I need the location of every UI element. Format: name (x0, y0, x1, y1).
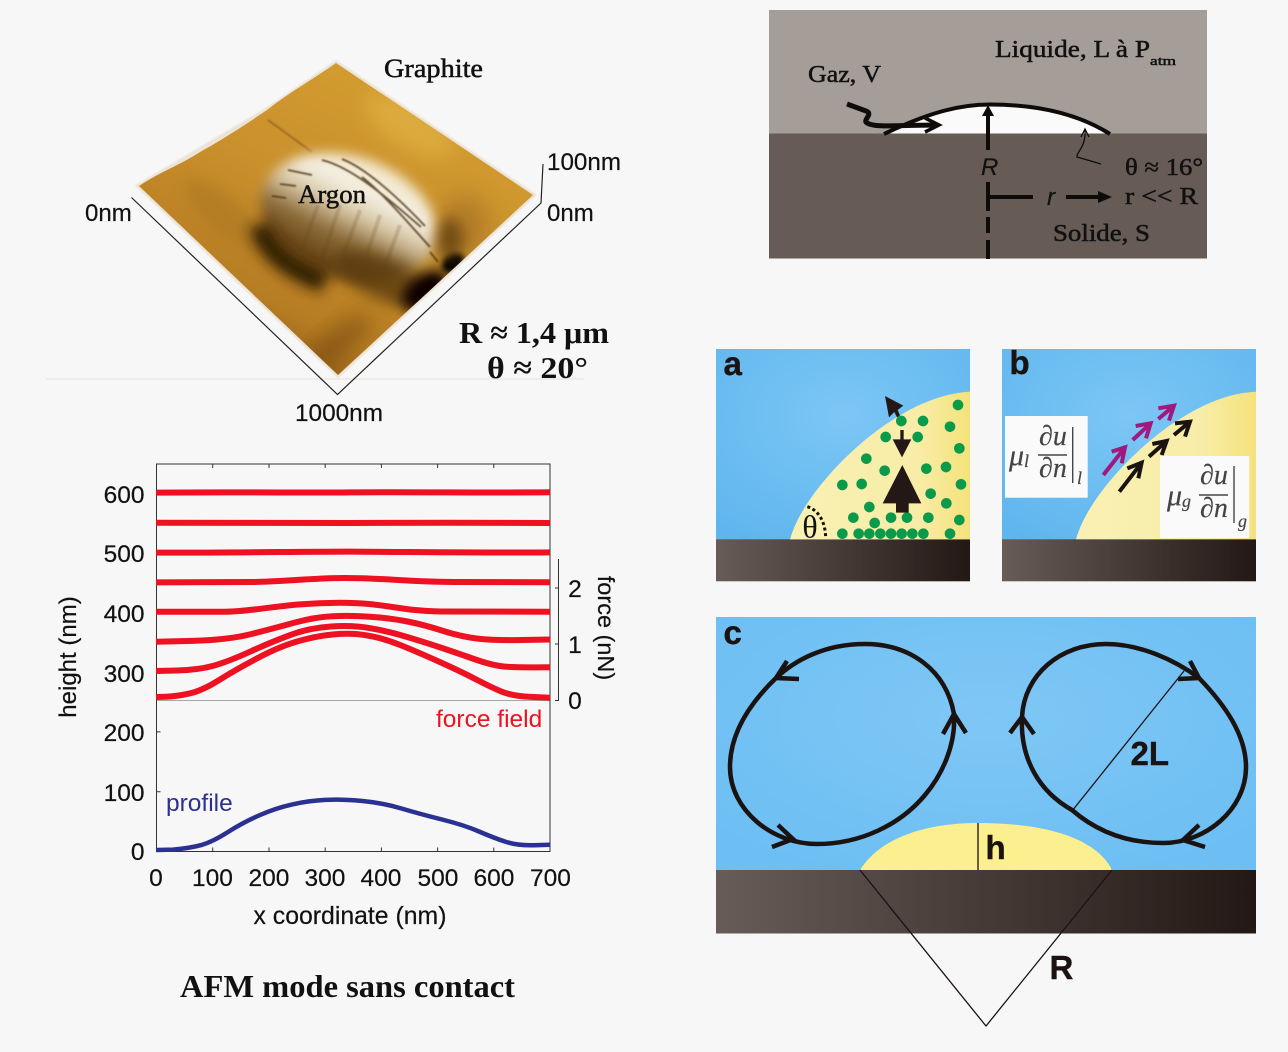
formula box: gas stress: ∂u (1200, 460, 1228, 491)
force field baseline (156, 700, 550, 702)
y axis numbers: 500 (104, 541, 144, 568)
force axis numbers (568, 576, 582, 715)
x axis numbers: 200 (249, 865, 289, 892)
axis label: 100nm: 100nm (547, 149, 621, 176)
force field label: force field (436, 706, 542, 733)
y axis title: height (nm) (55, 596, 82, 718)
red force field curves (156, 492, 550, 698)
formula box: liquid stress: l (1077, 468, 1082, 488)
force axis numbers: 2 (568, 576, 582, 603)
formula box: liquid stress: μ (1008, 439, 1024, 472)
liquid (769, 10, 1207, 134)
axis label: 1000nm: 1000nm (295, 400, 383, 427)
panel a: droplet with green molecules (716, 345, 970, 581)
y axis numbers (104, 482, 144, 866)
x axis numbers: 700 (530, 865, 571, 892)
left circulation loop (730, 644, 966, 847)
chart frame and ticks (156, 464, 550, 852)
gas bubble (884, 104, 1110, 134)
green molecules (837, 400, 966, 539)
panel: nanobubble schematic (769, 10, 1207, 259)
droplet (860, 823, 1112, 870)
force axis numbers: 1 (568, 632, 582, 659)
droplet (1076, 392, 1256, 539)
label: R italic: R (981, 154, 998, 181)
panel c: circulation around droplet (716, 614, 1256, 1026)
y axis numbers: 200 (104, 720, 144, 747)
profile label: profile (166, 790, 233, 817)
x axis numbers: 300 (305, 865, 345, 892)
symmetry axis (986, 182, 990, 259)
radius triangle (860, 870, 1112, 1026)
y axis numbers: 300 (104, 661, 144, 688)
AFM axes (132, 164, 543, 394)
formula box: gas stress: μ (1166, 479, 1182, 512)
label: R: R (1050, 949, 1074, 986)
panel letter b: b (1010, 344, 1030, 381)
axis label: 0nm right: 0nm (547, 200, 594, 227)
substrate (716, 870, 1256, 934)
formula box: liquid stress (1005, 416, 1088, 498)
label: gas: Gaz, V (808, 62, 882, 88)
label: theta: θ ≈ 16° (1125, 155, 1203, 181)
water background (716, 349, 970, 540)
bubble outline (884, 104, 1110, 134)
height line h (977, 823, 979, 870)
theta symbol: θ (802, 508, 818, 544)
label: liquid: Liquide, L à P (995, 37, 1150, 63)
AFM 3D image of argon nanobubble on graphite (130, 55, 540, 385)
formula box: liquid stress: ∂u (1039, 421, 1067, 452)
y axis numbers: 0 (131, 839, 144, 866)
droplet (790, 392, 970, 539)
formula box: gas stress: ∂n (1200, 493, 1228, 524)
arrow: escape arrow (885, 396, 903, 417)
label: 2L: 2L (1130, 735, 1169, 772)
x axis numbers: 400 (361, 865, 401, 892)
force axis numbers: 0 (568, 688, 582, 715)
formula box: liquid stress: ∂n (1039, 453, 1067, 484)
x axis numbers: 600 (474, 865, 514, 892)
substrate (1002, 539, 1256, 581)
contact angle arc (807, 507, 826, 539)
faint horizontal rule (46, 378, 584, 380)
force axis title: force (nN) (593, 576, 619, 680)
y axis numbers: 600 (104, 482, 144, 509)
substrate (716, 539, 970, 581)
water background (716, 617, 1256, 870)
arrow: radius r (988, 191, 1112, 203)
force field and height chart (55, 464, 619, 930)
axis label: 0nm left: 0nm (85, 200, 132, 227)
x axis numbers: 0 (149, 865, 163, 892)
label: h: h (986, 829, 1006, 866)
formula box: gas stress (1160, 456, 1249, 538)
right force axis (555, 559, 558, 700)
blue profile curve (156, 800, 550, 850)
water background (1002, 349, 1256, 540)
arrow: radius R (982, 105, 994, 150)
label: r much less than R: r << R (1125, 184, 1198, 210)
formula box: gas stress: g (1182, 491, 1191, 511)
panel letter c: c (724, 614, 742, 651)
label: Graphite: Graphite (384, 54, 483, 83)
label: solid: Solide, S (1053, 221, 1150, 247)
formula box: gas stress: g (1238, 511, 1247, 531)
black gas side arrows (1119, 422, 1190, 492)
arrow: small down arrow (893, 430, 911, 457)
y axis numbers: 100 (104, 780, 144, 807)
arrow: large pressure arrow (883, 465, 921, 513)
formula box: liquid stress: l (1024, 451, 1029, 471)
right circulation loop (1010, 644, 1246, 847)
droplet and molecules (790, 392, 970, 544)
arrow: gas pointer (847, 104, 939, 132)
diameter line 2L (1072, 671, 1184, 811)
y axis numbers: 400 (104, 601, 144, 628)
x axis title: x coordinate (nm) (254, 903, 446, 930)
panel letter a: a (724, 345, 742, 382)
annotation: radius: R ≈ 1,4 μm (459, 315, 609, 350)
label: Argon: Argon (298, 180, 366, 209)
x axis numbers: 500 (418, 865, 458, 892)
label: r italic: r (1047, 184, 1056, 211)
label: atm subscript: atm (1150, 53, 1176, 68)
x axis numbers (149, 865, 571, 892)
magenta liquid side arrows (1103, 406, 1174, 475)
panel b: shear stress balance (1002, 344, 1256, 581)
x axis numbers: 100 (192, 865, 233, 892)
arrow: contact angle pointer (1077, 129, 1101, 164)
caption: AFM mode sans contact (180, 968, 515, 1004)
solid (769, 134, 1207, 258)
annotation: contact angle: θ ≈ 20° (487, 350, 588, 385)
